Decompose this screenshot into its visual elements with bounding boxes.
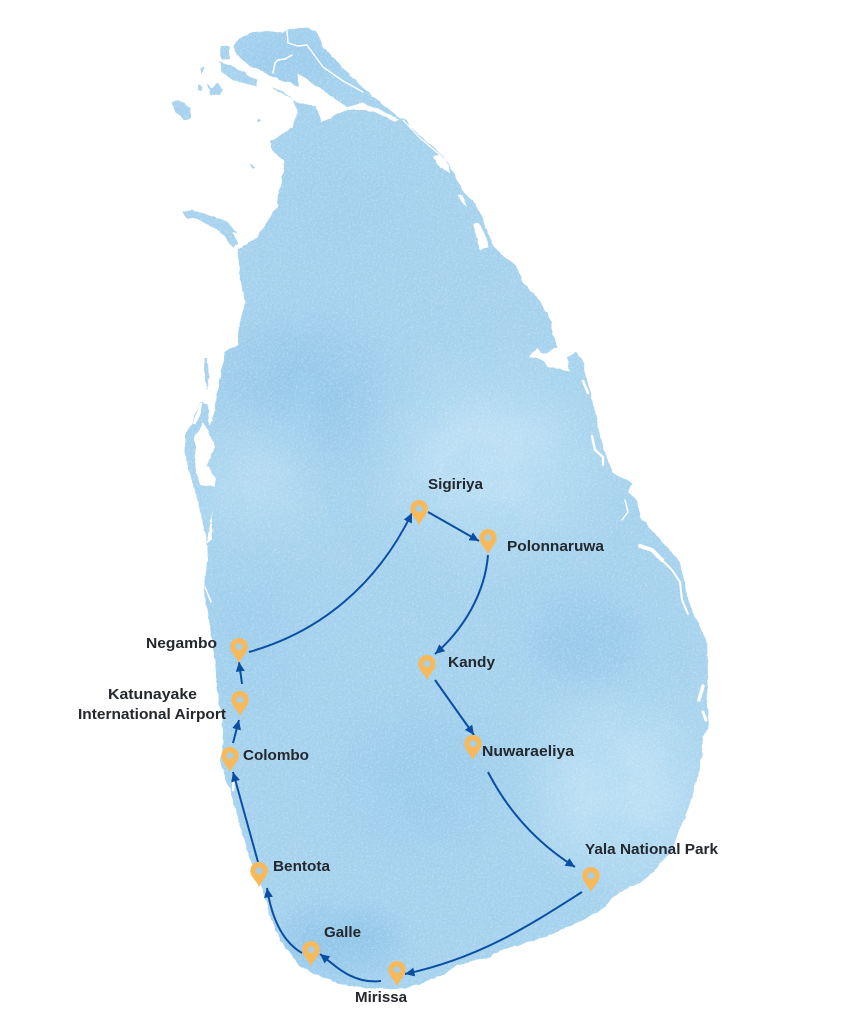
arrow: Galle to Bentota <box>267 888 302 953</box>
decorative washes <box>200 30 695 970</box>
arrow: Kandy to Nuwaraeliya <box>435 680 474 735</box>
label: Colombo: Colombo <box>243 747 309 764</box>
label: Polonnaruwa: Polonnaruwa <box>507 538 605 555</box>
pin: Mirissa <box>388 961 406 986</box>
label: Mirissa: Mirissa <box>355 989 408 1006</box>
arrow: Nuwaraeliya to Yala National Park <box>488 772 575 867</box>
pin: Negambo <box>230 638 248 663</box>
arrow: Sigiriya to Polonnaruwa <box>428 512 479 541</box>
pin: Nuwaraeliya <box>464 735 482 760</box>
label: Bentota: Bentota <box>273 858 331 875</box>
label: Katunayake: Katunayake <box>108 686 197 703</box>
pin: Kandy <box>418 655 436 680</box>
label: Galle: Galle <box>324 924 361 941</box>
arrow: Colombo to Katunayake <box>233 720 239 743</box>
pin: Katunayake International Airport <box>231 691 249 716</box>
pin: Colombo <box>221 747 239 772</box>
label: Negambo: Negambo <box>146 635 217 652</box>
thin white lagoons and channels <box>205 31 706 790</box>
arrow: Bentota to Colombo <box>233 772 258 862</box>
label: Sigiriya: Sigiriya <box>428 476 484 493</box>
place labels <box>78 476 719 1006</box>
pins <box>221 500 600 986</box>
pin: Bentota <box>250 862 268 887</box>
arrow: Mirissa to Galle <box>320 954 381 981</box>
pin: Galle <box>302 941 320 966</box>
map: Sri Lanka watercolor landmass <box>160 10 730 1010</box>
pin: Polonnaruwa <box>479 529 497 554</box>
label: Yala National Park: Yala National Park <box>585 841 719 858</box>
arrow: Yala National Park to Mirissa <box>405 892 582 974</box>
arrow: Polonnaruwa to Kandy <box>435 555 488 654</box>
pin: Sigiriya <box>410 500 428 525</box>
label: Nuwaraeliya: Nuwaraeliya <box>482 743 575 760</box>
arrow: Negambo to Sigiriya <box>249 513 412 652</box>
label: Kandy: Kandy <box>448 654 496 671</box>
label: International Airport: International Airport <box>78 706 226 723</box>
pin: Yala National Park <box>582 867 600 892</box>
arrow: Katunayake to Negambo <box>239 662 242 684</box>
route arrows <box>233 512 582 981</box>
